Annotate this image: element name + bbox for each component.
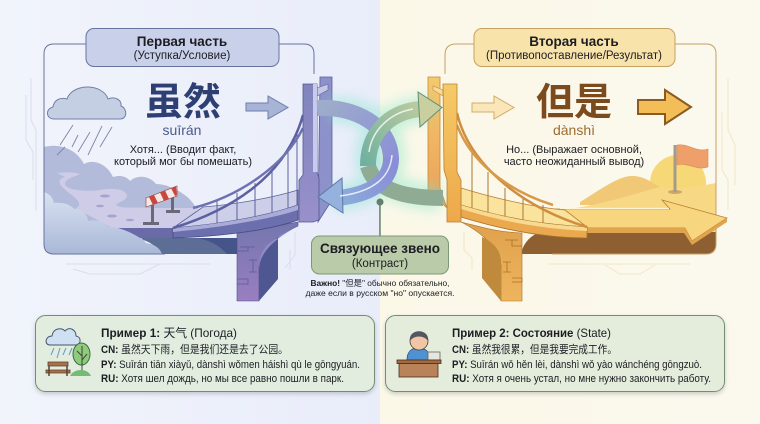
icon: rain cloud bench tree — [46, 329, 91, 376]
icon: flag — [668, 145, 708, 194]
panel: example 2: Пример 2: Состояние (State) — [452, 326, 611, 340]
band: green arrow — [368, 92, 443, 198]
panel: example 2 — [386, 316, 724, 392]
panel: second part frame — [445, 44, 716, 273]
chinese word: suiran: suīrán — [163, 122, 201, 138]
icon: tired person at desk — [397, 331, 441, 377]
panel: example 1: CN: 虽然天下雨，但是我们还是去了公园。 — [101, 343, 288, 356]
road arrow — [530, 200, 727, 245]
explanation: danshi — [504, 144, 644, 168]
panel: example 2: PY: Suīrán wǒ hěn lèi, dànshì wǒ yào wánchéng gōngzuò. — [452, 359, 702, 371]
icon: rain cloud — [47, 87, 126, 155]
bridge: left — [173, 77, 332, 301]
band: blue arrow upper — [317, 108, 391, 160]
heading: second part: (Противопоставление/Результат) — [486, 50, 662, 62]
chinese word: suiran: 虽然 — [145, 82, 221, 124]
panel: example 2: CN: 虽然我很累，但是我要完成工作。 — [452, 343, 617, 356]
explanation: danshi: Но... (Выражает основной, — [506, 144, 642, 156]
panel: example 1: Пример 1: 天气 (Погода) — [101, 325, 237, 340]
callout: connecting link: Связующее звено — [320, 241, 440, 256]
explanation: suiran: который мог бы помешать) — [114, 156, 252, 168]
note: important: Важно! "但是" обычно обязательно, — [310, 278, 450, 288]
explanation: suiran: Хотя... (Вводит факт, — [130, 144, 236, 156]
heading: first part: Первая часть — [137, 34, 227, 49]
chinese word: danshi: dànshì — [553, 122, 595, 138]
panel: example 1: RU: Хотя шел дождь, но мы все равно пошли в парк. — [101, 373, 344, 385]
icon: road barrier — [143, 186, 180, 225]
callout: connecting link: (Контраст) — [352, 258, 408, 270]
note: important — [306, 278, 454, 298]
chinese word: danshi: 但是 — [536, 82, 612, 124]
note: important: даже если в русском "но" опускается. — [306, 288, 454, 298]
heading: first part — [86, 28, 279, 66]
panel: example 1 — [36, 316, 374, 392]
pier — [461, 222, 522, 301]
heading: second part: Вторая часть — [529, 34, 619, 49]
callout: connecting link — [312, 198, 448, 274]
explanation: danshi: часто неожиданный вывод) — [504, 156, 644, 168]
explanation: suiran — [114, 144, 252, 168]
panel: example 1: PY: Suīrán tiān xiàyǔ, dànshì wǒmen háishì qù le gōngyuán. — [101, 359, 360, 371]
panel: first part frame — [44, 44, 314, 272]
arrow: suiran — [246, 96, 288, 119]
scene: stormy landscape — [44, 146, 237, 254]
connector: interlocked arrows — [317, 92, 443, 213]
bridge: right with road arrow — [428, 77, 727, 301]
heading: second part — [474, 28, 675, 66]
arrow: light — [472, 96, 514, 119]
panel: example 2: RU: Хотя я очень устал, но мне нужно закончить работу. — [452, 373, 711, 385]
scene: hills and sun — [522, 155, 716, 254]
heading: first part: (Уступка/Условие) — [134, 50, 230, 62]
arrow: bold orange — [638, 90, 691, 124]
band: blue arrow lower — [318, 155, 392, 213]
pier — [237, 222, 298, 301]
